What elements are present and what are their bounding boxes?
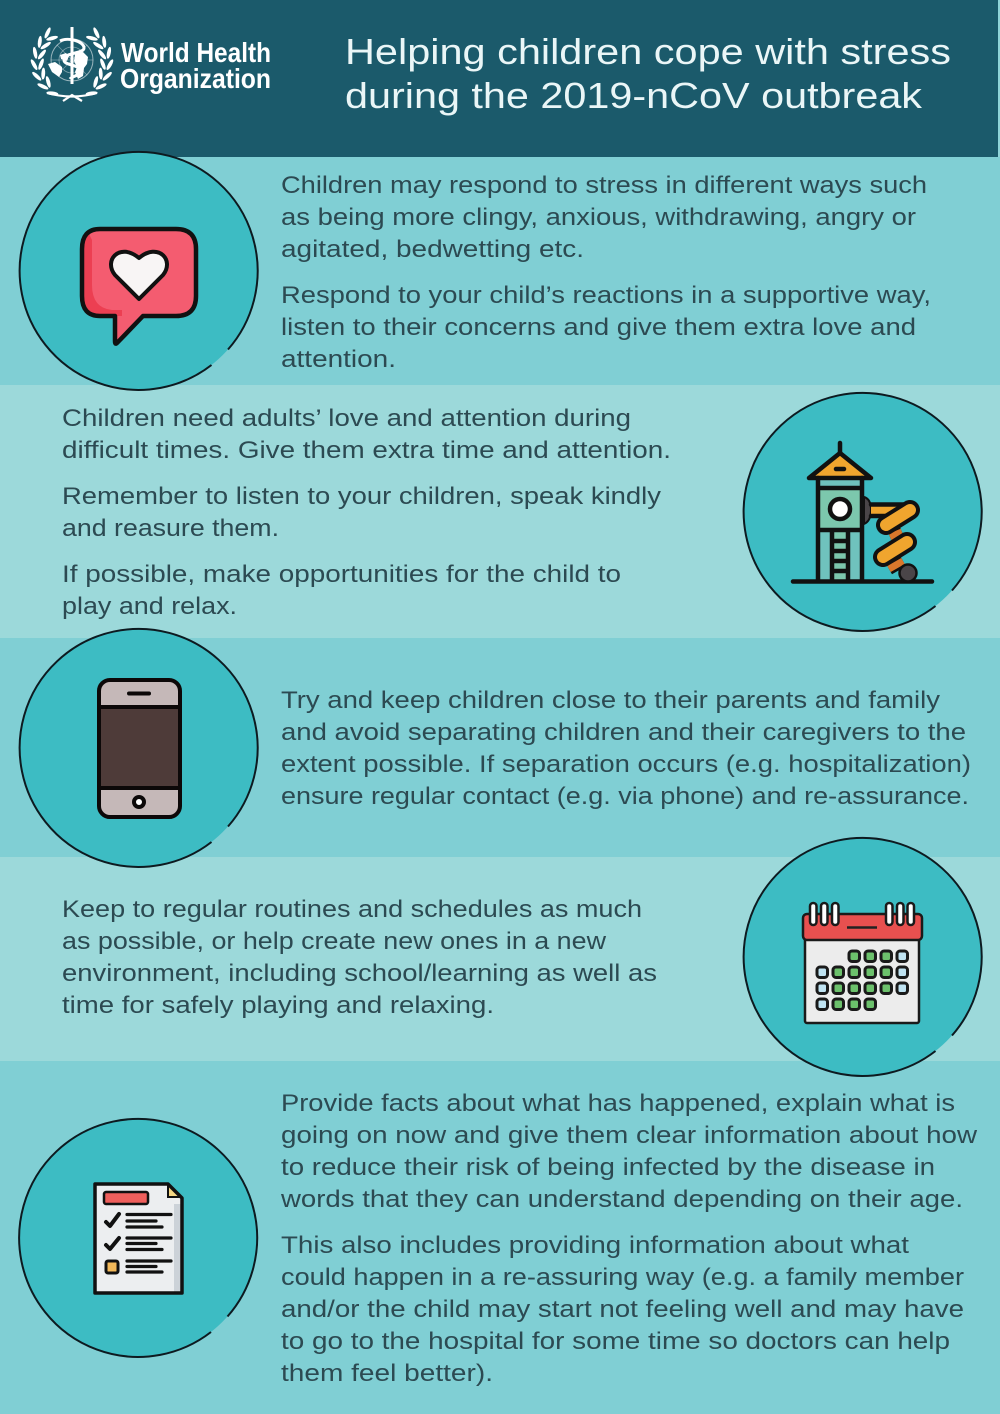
text block: If possible, make opportunities for the child to: [62, 561, 621, 588]
text block: as being more clingy, anxious, withdrawing, angry or: [281, 204, 916, 231]
title: [345, 31, 951, 116]
text block: Provide facts about what has happened, explain what is: [281, 1090, 955, 1117]
text block: [281, 172, 931, 373]
text block: Keep to regular routines and schedules as much: [62, 896, 642, 923]
text block: Try and keep children close to their parents and family: [281, 687, 940, 714]
header banner: [0, 0, 998, 157]
text block: attention.: [281, 346, 396, 373]
text block: [281, 687, 971, 810]
text block: time for safely playing and relaxing.: [62, 992, 494, 1019]
text block: them feel better).: [281, 1360, 493, 1387]
text block: Respond to your child’s reactions in a supportive way,: [281, 282, 931, 309]
WHO logo: [30, 27, 271, 101]
text block: could happen in a re-assuring way (e.g. a family member: [281, 1264, 964, 1291]
text block: Remember to listen to your children, speak kindly: [62, 483, 661, 510]
panel: love and attention: [62, 393, 982, 631]
text block: difficult times. Give them extra time and attention.: [62, 437, 671, 464]
icon: mobile phone: [20, 629, 258, 867]
icon: calendar: [744, 838, 982, 1076]
text block: and/or the child may start not feeling well and may have: [281, 1296, 964, 1323]
text block: agitated, bedwetting etc.: [281, 236, 584, 263]
text block: This also includes providing information about what: [281, 1232, 909, 1259]
title: Helping children cope with stress: [345, 31, 951, 72]
text block: play and relax.: [62, 593, 237, 620]
text block: to go to the hospital for some time so doctors can help: [281, 1328, 950, 1355]
text block: extent possible. If separation occurs (e.g. hospitalization): [281, 751, 971, 778]
panel: keep children close: [20, 629, 971, 867]
text block: environment, including school/learning as well as: [62, 960, 657, 987]
icon: playground slide: [744, 393, 982, 631]
panel: provide facts: [19, 1090, 978, 1387]
text block: and reasure them.: [62, 515, 279, 542]
WHO emblem: [30, 27, 114, 101]
WHO wordmark: World Health: [121, 37, 271, 68]
text block: and avoid separating children and their caregivers to the: [281, 719, 966, 746]
text block: as possible, or help create new ones in a new: [62, 928, 607, 955]
text block: [280, 1090, 978, 1387]
text block: [62, 405, 671, 620]
WHO wordmark: [120, 37, 271, 94]
WHO wordmark: Organization: [120, 63, 271, 94]
text block: Children need adults’ love and attention during: [62, 405, 631, 432]
text block: Children may respond to stress in different ways such: [281, 172, 927, 199]
text block: words that they can understand depending on their age.: [280, 1186, 963, 1213]
panel: regular routines: [62, 838, 982, 1076]
icon: speech bubble with heart: [20, 152, 258, 390]
icon: checklist document: [19, 1119, 257, 1357]
laurel wreath: [30, 27, 114, 96]
panel: respond supportively: [20, 152, 931, 390]
text block: [62, 896, 657, 1019]
text block: to reduce their risk of being infected by the disease in: [281, 1154, 935, 1181]
title: during the 2019-nCoV outbreak: [345, 75, 923, 116]
text block: going on now and give them clear information about how: [281, 1122, 978, 1149]
text block: listen to their concerns and give them extra love and: [281, 314, 916, 341]
text block: ensure regular contact (e.g. via phone) and re-assurance.: [281, 783, 969, 810]
